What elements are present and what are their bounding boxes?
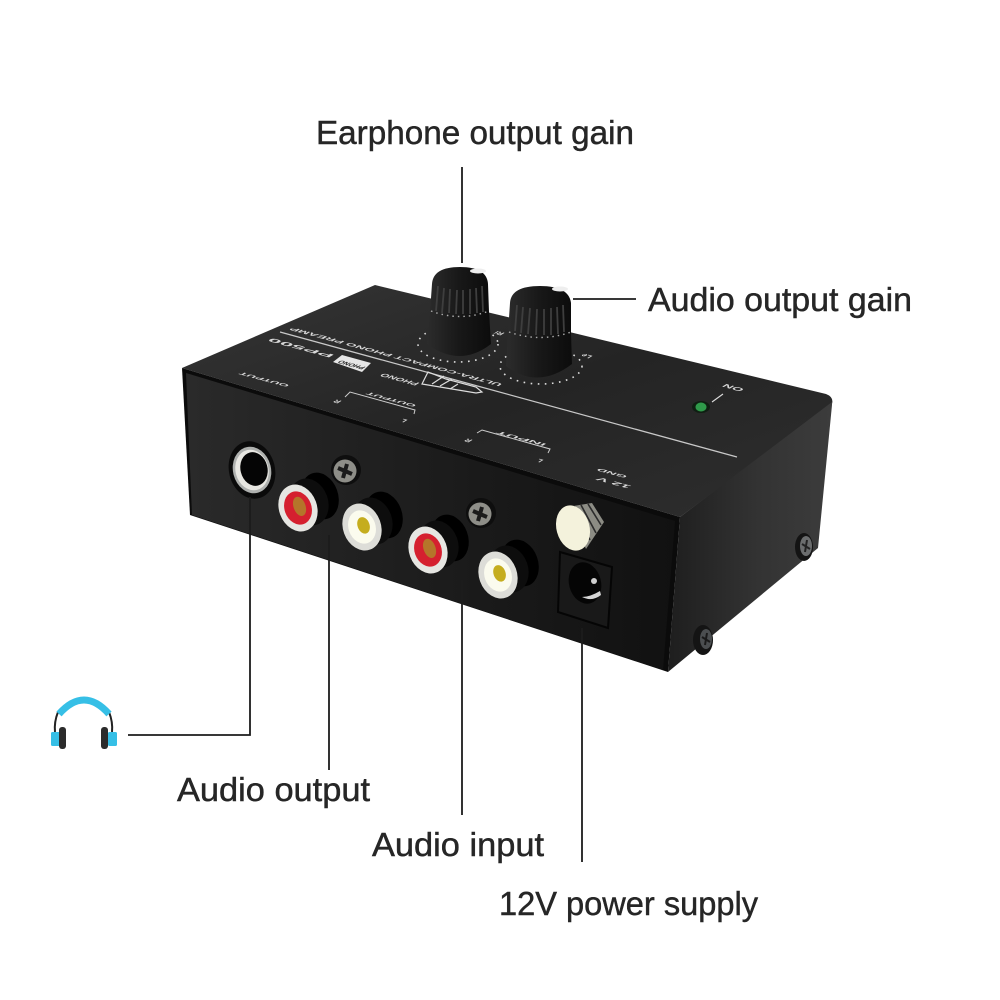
- knob: earphone gain: [418, 267, 498, 362]
- printed text: knob captions: Ri: [492, 330, 507, 336]
- front panel: [182, 368, 680, 672]
- headphone output jack: [223, 436, 281, 504]
- printed bracket: input channels: INPUT: [494, 430, 549, 446]
- side screw lower: [693, 625, 713, 655]
- RCA socket: output left, white: [336, 486, 409, 556]
- printed text: jack output: OUTPUT: [237, 371, 292, 387]
- icon: headphones: [51, 700, 117, 749]
- RCA socket: input right, red: [402, 509, 475, 579]
- printed bracket: output channels: L: [397, 418, 410, 423]
- leader line: audio output: [328, 535, 330, 770]
- label: audio output: Audio output: [177, 771, 370, 808]
- printed bracket: output channels: [330, 391, 419, 423]
- printed bracket: output channels: R: [330, 398, 344, 404]
- preamp device: [182, 267, 832, 672]
- RCA socket: output right, red: [272, 467, 345, 537]
- top panel: [182, 285, 832, 517]
- printed text: knob captions: [492, 330, 595, 359]
- RCA socket: input left, white: [472, 534, 545, 604]
- printed logo: phono badge: PHONO: [335, 359, 368, 370]
- printed bracket: input channels: R: [461, 437, 475, 443]
- printed bracket: input channels: L: [533, 458, 546, 463]
- knurled ground terminal: [551, 502, 604, 554]
- leader line: audio gain: [573, 298, 636, 300]
- power LED and caption: [692, 383, 747, 413]
- screw left: [331, 455, 361, 485]
- label: audio input: Audio input: [372, 826, 544, 863]
- dial dots: [500, 348, 582, 384]
- panel divider line: [280, 332, 737, 457]
- label: audio output gain: Audio output gain: [648, 281, 912, 318]
- leader line: earphone gain: [461, 167, 463, 263]
- side panel: [668, 402, 832, 672]
- leader line: headphone jack to icon: [128, 497, 250, 735]
- printed text: power rating: GND: [594, 467, 630, 478]
- DC power socket: [558, 552, 612, 628]
- printed text: power rating: 12 V: [594, 476, 634, 489]
- label: 12V power supply: 12V power supply: [499, 885, 758, 922]
- printed logo: phono badge: [333, 355, 482, 393]
- screw right: [466, 498, 496, 528]
- printed bracket: input channels: [461, 430, 550, 463]
- side screw upper: [795, 533, 813, 561]
- printed text: model: PP500: [264, 337, 337, 359]
- printed text: power rating: [594, 467, 634, 489]
- power LED and caption: ON: [720, 383, 747, 392]
- leader line: power supply: [581, 628, 583, 862]
- dial dots: [418, 326, 498, 362]
- printed bracket: output channels: OUTPUT: [364, 391, 419, 407]
- printed logo: phono badge: PHONO: [378, 372, 422, 386]
- knob: audio gain: [500, 286, 582, 384]
- printed text: preamp subtitle: ULTRA-COMPACT PHONO PREAMP: [288, 326, 505, 386]
- label: earphone output gain: Earphone output gain: [316, 114, 634, 151]
- leader line: audio input: [461, 580, 463, 815]
- printed text: knob captions: Le: [578, 353, 595, 359]
